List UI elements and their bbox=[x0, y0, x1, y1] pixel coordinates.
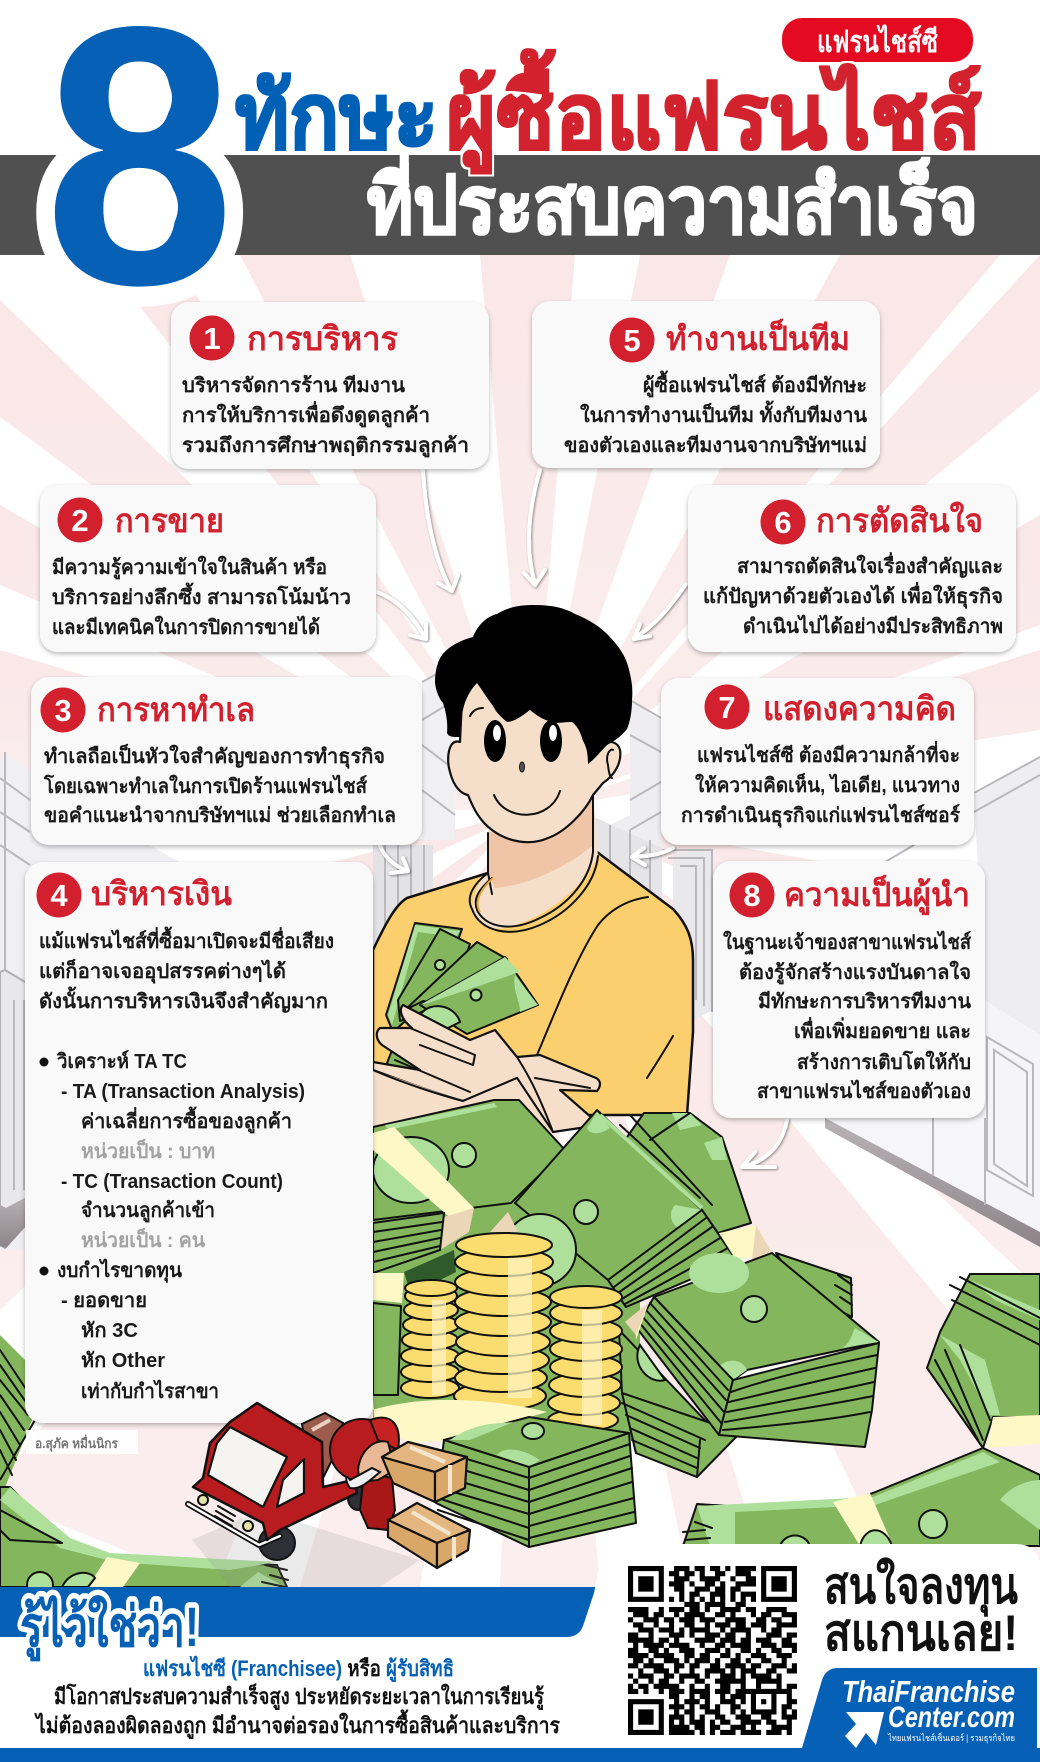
panel: 4 บริหารเงิน bbox=[25, 862, 373, 1423]
text block: การดำเนินธุรกิจแก่แฟรนไชส์ซอร์ bbox=[681, 803, 960, 828]
intro text: แม้แฟรนไชส์ที่ซื้อมาเปิดจะมีชื่อเสียง bbox=[39, 926, 334, 953]
truck shadow bbox=[192, 1510, 420, 1587]
panel: 5 ทำงานเป็นทีม bbox=[532, 301, 880, 468]
number badge 2 bbox=[58, 498, 102, 542]
did you know text: ไม่ต้องลองผิดลองถูก มีอำนาจต่อรองในการซื้อสินค้าและบริการ bbox=[34, 1709, 560, 1740]
text block: ต้องรู้จักสร้างแรงบันดาลใจ bbox=[739, 960, 971, 986]
category pill: แฟรนไชส์ซี bbox=[817, 24, 938, 59]
lower bill under coins bbox=[619, 1330, 719, 1477]
panel: 8 ความเป็นผู้นำ bbox=[713, 861, 985, 1118]
text block: เพื่อเพิ่มยอดขาย และ bbox=[794, 1016, 971, 1043]
hair bbox=[435, 605, 632, 764]
list: profit and loss: หัก 3C bbox=[81, 1320, 138, 1342]
arrow: card 2 to character bbox=[377, 592, 426, 639]
list: profit and loss: - ยอดขาย bbox=[61, 1290, 147, 1312]
bottom panel: white background bbox=[0, 1637, 640, 1748]
heading: การหาทำเล bbox=[97, 691, 255, 728]
text block: บริหารจัดการร้าน ทีมงาน bbox=[182, 374, 405, 397]
number badge 8: 8 bbox=[743, 878, 761, 913]
number badge 4 bbox=[36, 872, 82, 918]
arrow: card 3 to character bbox=[380, 846, 408, 873]
number badge 5 bbox=[610, 318, 654, 362]
text block: ให้ความคิดเห็น, ไอเดีย, แนวทาง bbox=[695, 772, 960, 797]
courier bbox=[360, 1472, 395, 1530]
number badge 7: 7 bbox=[718, 690, 736, 725]
heading: บริหารเงิน bbox=[91, 875, 232, 912]
number badge 3 bbox=[40, 688, 86, 732]
did you know text: มีโอกาสประสบความสำเร็จสูง ประหยัดระยะเวลาในการเรียนรู้ bbox=[54, 1682, 544, 1711]
list: TA TC analysis: - TA (Transaction Analysis) bbox=[61, 1081, 305, 1103]
front stack bbox=[444, 1417, 629, 1467]
panel: 7 แสดงความคิด bbox=[661, 678, 974, 845]
title line 1 bbox=[235, 49, 982, 174]
coins: left stack bbox=[401, 1280, 459, 1398]
heading: การขาย bbox=[115, 502, 224, 539]
upper box bbox=[382, 1442, 467, 1472]
photo credit bbox=[26, 1430, 138, 1454]
text block: แก้ปัญหาด้วยตัวเองได้ เพื่อให้ธุรกิจ bbox=[703, 581, 1003, 609]
pile backing bbox=[373, 1100, 640, 1440]
heading: การตัดสินใจ bbox=[816, 501, 983, 539]
panel: 6 การตัดสินใจ bbox=[688, 485, 1016, 652]
side window bbox=[277, 1459, 304, 1507]
list: TA TC analysis bbox=[40, 1050, 305, 1252]
QR code bbox=[628, 1566, 797, 1735]
connector arrows pointing at the character bbox=[377, 470, 787, 1167]
text block: สามารถตัดสินใจเรื่องสำคัญและ bbox=[737, 551, 1003, 578]
bill behind pile, upper right bbox=[625, 1113, 751, 1233]
illustration: central money pile bbox=[372, 1100, 879, 1547]
title band bbox=[0, 155, 1040, 255]
text block: โดยเฉพาะทำเลในการเปิดร้านแฟรนไชส์ bbox=[43, 774, 368, 798]
arrow: card 1 to character bbox=[423, 470, 458, 591]
windshield bbox=[208, 1427, 287, 1507]
heading: ทำงานเป็นทีม bbox=[666, 318, 850, 357]
text block: ของตัวเองและทีมงานจากบริษัทฯแม่ bbox=[564, 434, 867, 457]
scan call to action bbox=[824, 1557, 1018, 1661]
number badge 1: 1 bbox=[203, 321, 221, 356]
heading: ความเป็นผู้นำ bbox=[784, 874, 970, 916]
lower box bbox=[388, 1503, 470, 1543]
illustration: left money stacks bbox=[0, 1335, 288, 1598]
text block: การให้บริการเพื่อดึงดูดลูกค้า bbox=[182, 400, 430, 429]
text block: ดำเนินไปได้อย่างมีประสิทธิภาพ bbox=[743, 614, 1003, 638]
text block: ผู้ซื้อแฟรนไชส์ ต้องมีทักษะ bbox=[643, 370, 867, 399]
coins: right stack bbox=[548, 1286, 622, 1431]
photo credit: อ.สุภัค หมื่นนิกร bbox=[35, 1434, 118, 1452]
coins: middle stack bbox=[454, 1233, 553, 1410]
large bill upper left bbox=[373, 1100, 565, 1220]
hands and arm bbox=[373, 1005, 600, 1135]
text block: และมีเทคนิคในการปิดการขายได้ bbox=[52, 615, 320, 639]
heading: การบริหาร bbox=[247, 320, 398, 357]
did you know text: แฟรนไชซี (Franchisee) หรือ ผู้รับสิทธิ bbox=[143, 1655, 454, 1683]
text block: ในฐานะเจ้าของสาขาแฟรนไชส์ bbox=[723, 930, 972, 956]
text block bbox=[52, 555, 351, 639]
background: right building bbox=[590, 700, 1040, 1247]
text block: แฟรนไชส์ซี ต้องมีความกล้าที่จะ bbox=[697, 740, 960, 767]
list: TA TC analysis: หน่วยเป็น : คน bbox=[81, 1227, 205, 1252]
text block: มีทักษะการบริหารทีมงาน bbox=[758, 990, 971, 1013]
text block bbox=[564, 370, 867, 457]
text block bbox=[43, 743, 396, 827]
cab bbox=[193, 1403, 357, 1540]
fan of bills in hand bbox=[386, 923, 538, 1103]
list: TA TC analysis: จำนวนลูกค้าเข้า bbox=[81, 1199, 215, 1224]
cargo bbox=[302, 1413, 343, 1480]
text block bbox=[723, 930, 972, 1103]
shirt folds bbox=[537, 897, 673, 1078]
list: TA TC analysis: ค่าเฉลี่ยการซื้อของลูกค้า bbox=[81, 1106, 292, 1135]
scan call to action: สแกนเลย! bbox=[824, 1605, 1018, 1661]
panel: 1 การบริหาร bbox=[171, 302, 489, 469]
eyebrow, nose, smile bbox=[470, 708, 560, 815]
list: TA TC analysis: วิเคราะห์ TA TC bbox=[56, 1050, 187, 1073]
brand logo: ไทยแฟรนไชส์เซ็นเตอร์ | รวมธุรกิจไทย bbox=[887, 1731, 1015, 1744]
lower right stack top bbox=[654, 1253, 879, 1380]
text block: ขอคำแนะนำจากบริษัทฯแม่ ช่วยเลือกทำเล bbox=[44, 804, 396, 827]
face bbox=[448, 660, 620, 842]
did you know heading: รู้ไว้ใช่ว่า! bbox=[20, 1594, 199, 1662]
illustration: delivery truck and courier bbox=[188, 1403, 470, 1587]
intro text: แต่ก็อาจเจออุปสรรคต่างๆได้ bbox=[39, 958, 286, 984]
eyes bbox=[484, 720, 562, 762]
number badge 8 bbox=[730, 872, 774, 918]
number badge 4: 4 bbox=[50, 878, 68, 913]
text block: รวมถึงการศึกษาพฤติกรรมลูกค้า bbox=[182, 434, 469, 459]
text block: สาขาแฟรนไชส์ของตัวเอง bbox=[757, 1079, 971, 1103]
lights and grille bbox=[198, 1495, 208, 1505]
illustration: right money stacks bbox=[683, 1274, 1040, 1546]
neck bbox=[472, 790, 598, 929]
footer stripe bbox=[0, 1748, 1040, 1762]
bottom banner blue strip bbox=[0, 1587, 596, 1637]
arrow: card 8 to money pile bbox=[742, 1120, 787, 1167]
number badge 3: 3 bbox=[54, 693, 72, 728]
text block: บริการอย่างลึกซึ้ง สามารถโน้มน้าว bbox=[52, 582, 351, 609]
shirt bbox=[373, 852, 693, 1115]
intro text: ดังนั้นการบริหารเงินจึงสำคัญมาก bbox=[39, 986, 328, 1013]
wheel bbox=[259, 1526, 295, 1560]
number badge 7 bbox=[704, 684, 750, 730]
diamond bill edge stack bbox=[608, 1210, 736, 1307]
list: TA TC analysis: - TC (Transaction Count) bbox=[61, 1171, 283, 1193]
dark bill edges behind coins bbox=[404, 1250, 456, 1285]
logo arrow bbox=[845, 1712, 884, 1748]
list: profit and loss: หัก Other bbox=[81, 1350, 165, 1372]
background sunburst rays bbox=[0, 255, 1040, 1587]
panel: 2 การขาย bbox=[40, 485, 376, 652]
arrow: card 5 to character bbox=[524, 470, 545, 585]
QR call-to-action card bbox=[570, 1544, 1040, 1748]
title line 1: ผู้ซื้อแฟรนไชส์ bbox=[446, 49, 982, 174]
list: TA TC analysis: หน่วยเป็น : บาท bbox=[81, 1138, 215, 1163]
arrow: card 7 to character bbox=[632, 848, 673, 865]
background: left building bbox=[0, 664, 455, 1250]
brand logo bbox=[802, 1668, 1037, 1748]
text block: ในการทำงานเป็นทีม ทั้งกับทีมงาน bbox=[580, 400, 867, 427]
shirt collar bbox=[470, 852, 598, 932]
panel: 3 การหาทำเล bbox=[31, 677, 422, 845]
title line 1: ทักษะ bbox=[235, 66, 438, 168]
category pill bbox=[782, 18, 973, 62]
list: profit and loss: เท่ากับกำไรสาขา bbox=[81, 1379, 219, 1403]
number badge 1 bbox=[190, 316, 234, 360]
number badge 6: 6 bbox=[774, 505, 792, 540]
heading: แสดงความคิด bbox=[763, 690, 956, 727]
text block bbox=[681, 740, 960, 828]
number badge 2: 2 bbox=[71, 503, 89, 538]
list: profit and loss: งบกำไรขาดทุน bbox=[57, 1258, 182, 1283]
arrow: card 6 to character bbox=[634, 584, 686, 639]
bumper bbox=[188, 1504, 280, 1545]
cream paper band bbox=[372, 1400, 547, 1443]
did you know text bbox=[34, 1655, 560, 1740]
text block bbox=[703, 551, 1003, 638]
text block: สร้างการเติบโตให้กับ bbox=[797, 1050, 971, 1074]
list: profit and loss bbox=[40, 1258, 219, 1403]
number badge 6 bbox=[760, 500, 806, 544]
illustration: character holding money bbox=[373, 605, 693, 1135]
text block bbox=[182, 374, 469, 459]
diamond bill at centre bbox=[515, 1110, 702, 1307]
text block: มีความรู้ความเข้าใจในสินค้า หรือ bbox=[52, 555, 327, 581]
intro text bbox=[39, 926, 334, 1013]
lower right stack small back bbox=[776, 1253, 852, 1317]
text block: ทำเลถือเป็นหัวใจสำคัญของการทำธุรกิจ bbox=[44, 743, 385, 769]
number badge 5: 5 bbox=[623, 323, 641, 358]
